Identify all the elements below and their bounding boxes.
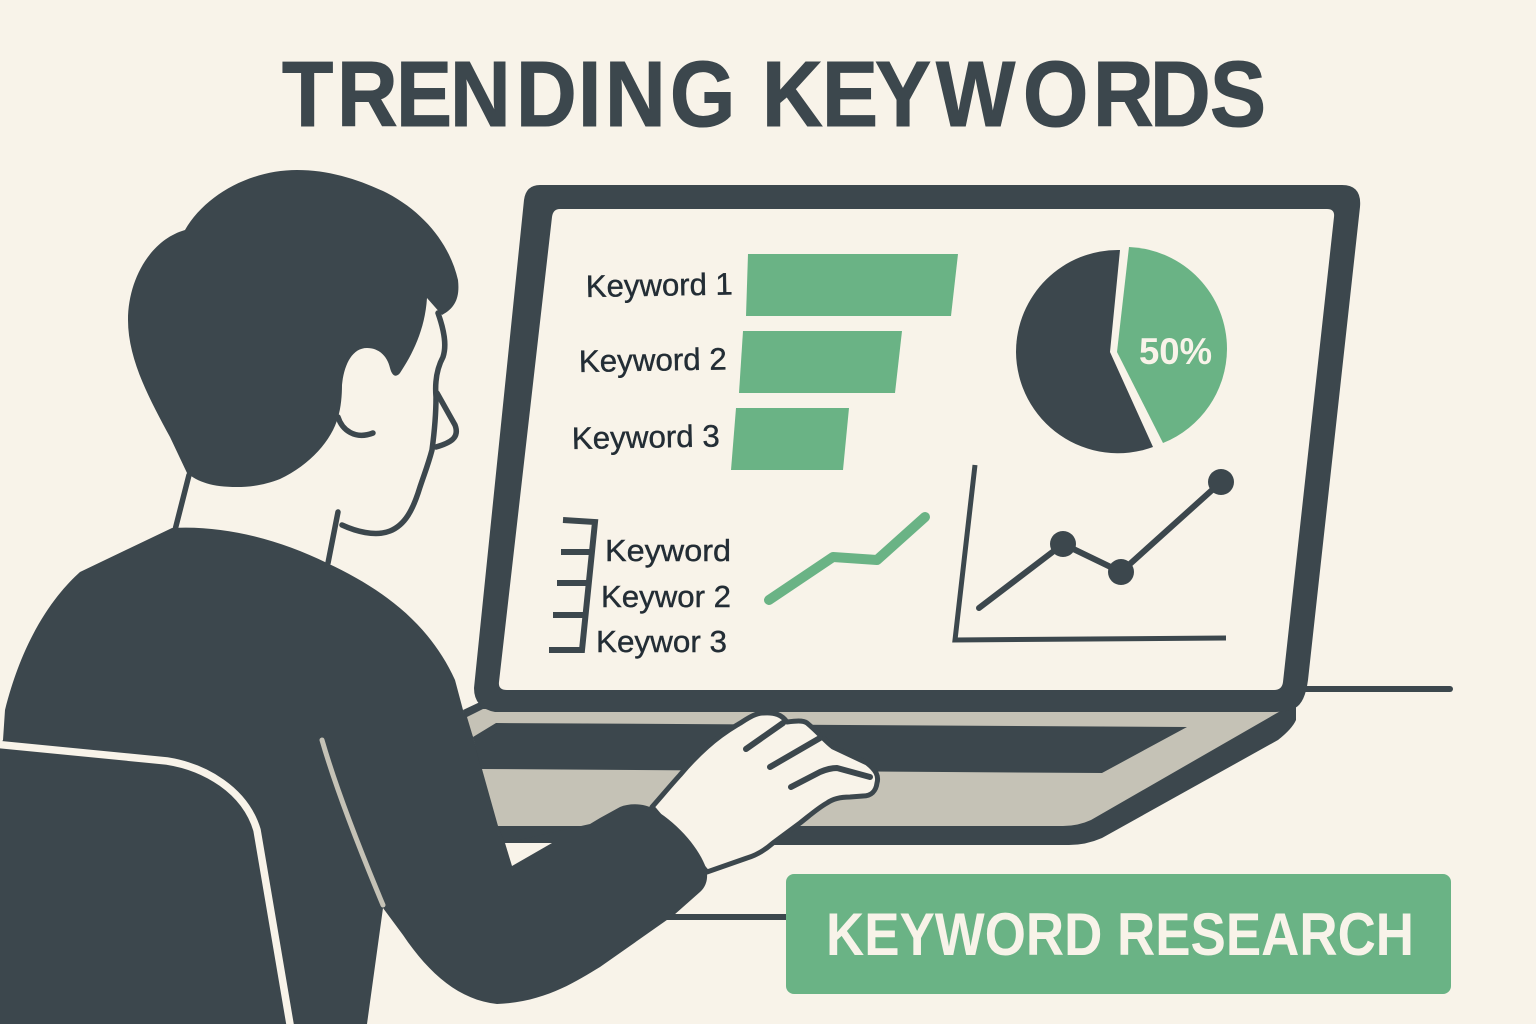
laptop [463,185,1360,845]
table line right [1300,686,1450,692]
hand [652,713,878,872]
label: Keywor 2: Keywor 2 [601,579,731,614]
pie label: 50% [1139,331,1212,372]
laptop screen [474,185,1360,712]
torso and arm [0,528,707,1024]
finger lines [746,723,870,787]
line chart [955,465,1234,640]
laptop base [463,702,1296,845]
body crease line [322,740,383,905]
bar 3 [731,408,849,470]
label: Keyword 2: Keyword 2 [579,341,727,379]
badge text: KEYWORD RESEARCH [826,901,1414,968]
title: TRENDING KEYWORDS [282,42,1266,146]
pie chart [1016,247,1227,453]
label: Keyword 1: Keyword 1 [586,266,733,304]
label: Keyword: Keyword [605,533,731,568]
gap under arm [505,843,552,866]
ruler list [549,520,731,659]
bar 1 [746,254,958,316]
bar 2 [739,331,902,393]
screen dashboard [549,247,1234,659]
badge: keyword research [786,874,1451,994]
table line left [660,914,790,920]
keyboard [473,723,1187,773]
bar chart [572,254,958,470]
person [0,170,878,1024]
face outline [175,313,456,563]
label: Keyword 3: Keyword 3 [572,418,720,456]
green trend line [769,517,925,600]
label: Keywor 3: Keywor 3 [596,624,727,659]
chair [0,744,291,1024]
hair [128,170,458,487]
